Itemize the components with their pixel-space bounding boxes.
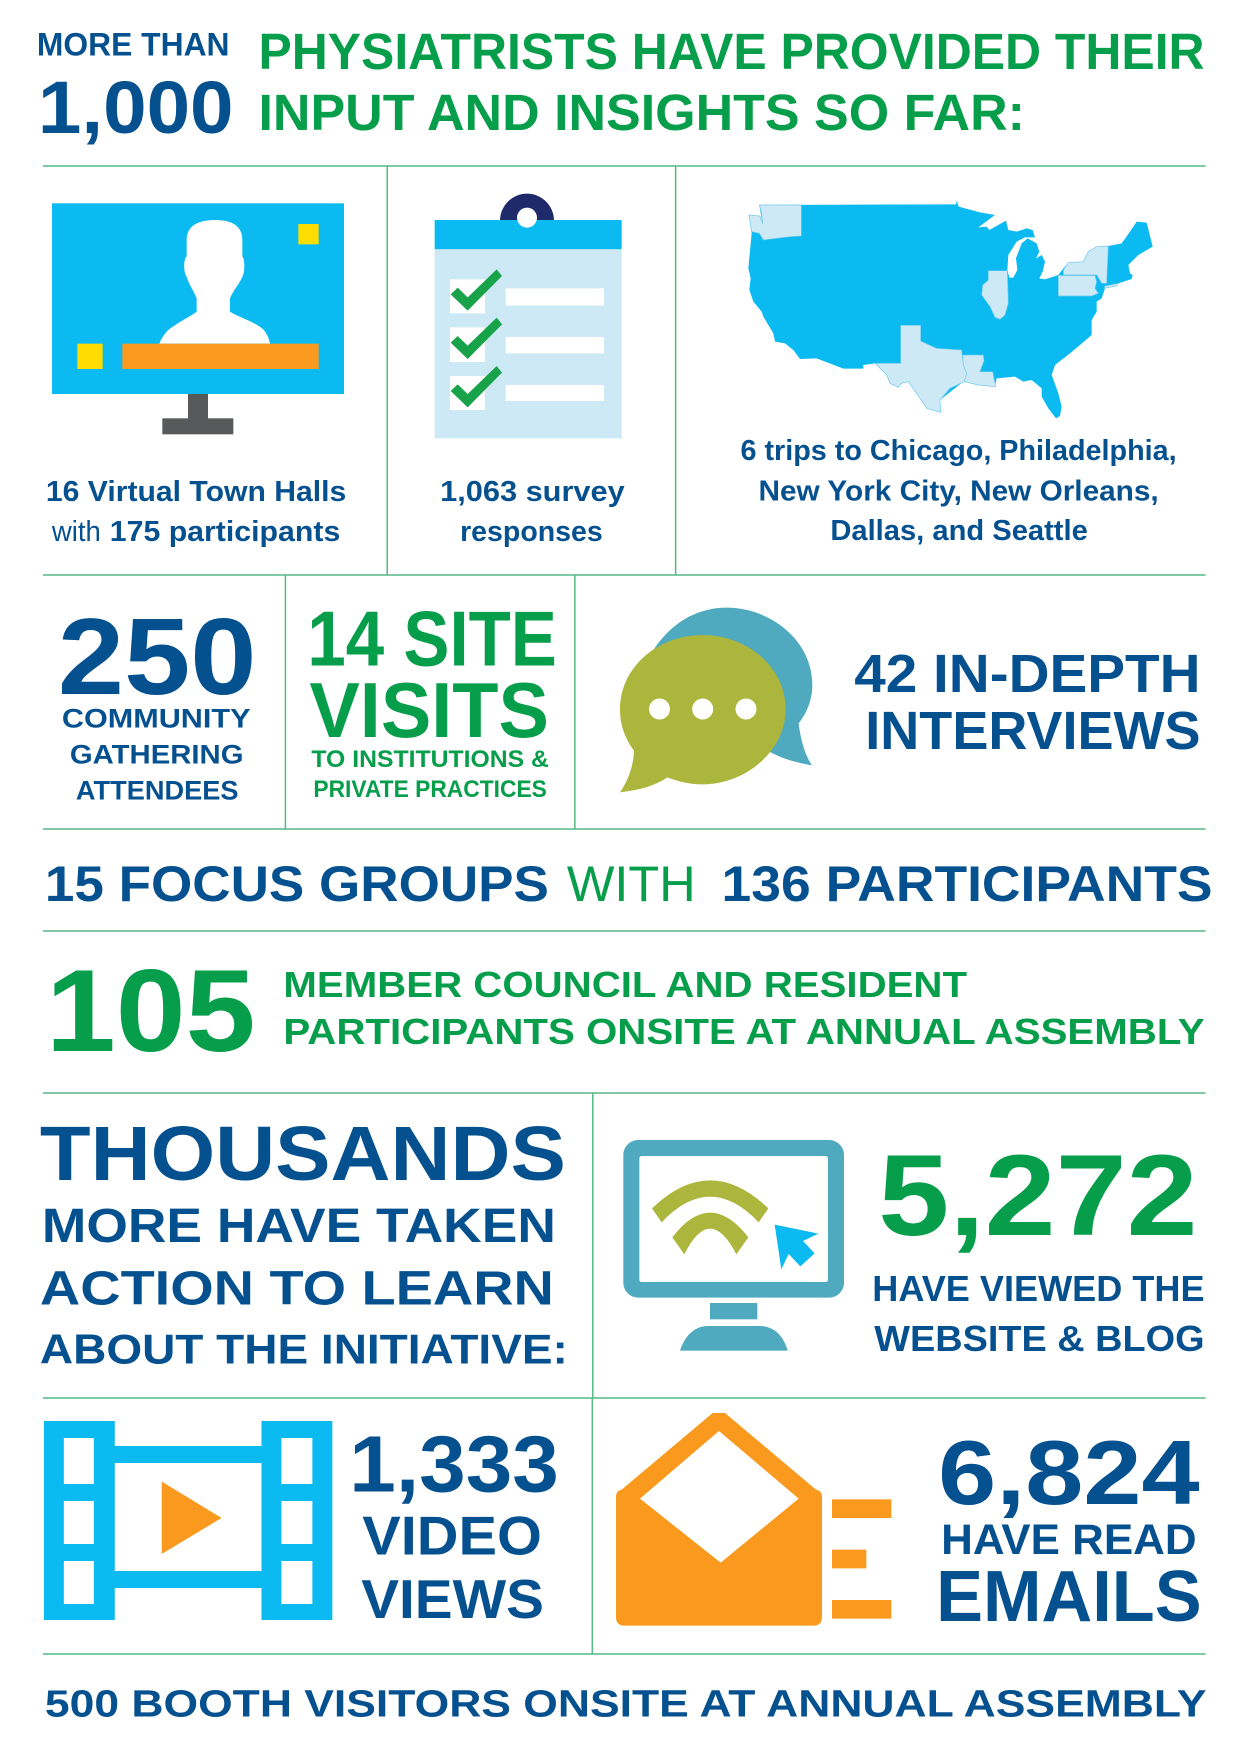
heading: thousands more: THOUSANDS <box>40 1111 566 1197</box>
icon: clipboard checklist <box>435 194 622 438</box>
icon: computer with wifi <box>623 1140 844 1351</box>
stat: 105 member council: 105 <box>46 945 255 1076</box>
heading: more than 1,000: 1,000 <box>38 66 234 149</box>
stat: 250 community gathering attendees: 250 <box>58 596 256 718</box>
panel: survey <box>435 194 625 548</box>
stat: 15 focus groups <box>45 856 1213 912</box>
text: trips caption: 6 trips to Chicago, Philadelphia, <box>741 435 1177 467</box>
icon: US map <box>748 201 1153 418</box>
stat: 15 focus groups: WITH <box>567 856 696 912</box>
text: trips caption <box>741 435 1177 547</box>
stat: 1,333 video views <box>349 1419 559 1630</box>
heading: physiatrists: INPUT AND INSIGHTS SO FAR: <box>258 84 1025 141</box>
stat: 6,824 have read emails: EMAILS <box>936 1557 1202 1637</box>
heading: more than 1,000: MORE THAN <box>37 26 230 63</box>
text: town halls caption: 175 participants <box>110 516 340 548</box>
stat: 1,333 video views: 1,333 <box>349 1419 559 1509</box>
stat: 500 booth visitors: 500 BOOTH VISITORS ONSITE AT ANNUAL ASSEMBLY <box>45 1683 1207 1726</box>
icon: speech bubbles <box>620 608 812 792</box>
stat: 42 in-depth interviews: INTERVIEWS <box>865 701 1201 761</box>
stat: 5,272 website views: 5,272 <box>878 1132 1198 1260</box>
heading: more than 1,000 <box>37 26 234 149</box>
text: town halls caption: with <box>51 516 101 548</box>
stat: 105 member council: MEMBER COUNCIL AND RESIDENT <box>283 964 967 1005</box>
text: survey caption: responses <box>460 516 603 548</box>
title block <box>37 23 1205 149</box>
icon: envelope <box>616 1413 891 1626</box>
text: survey caption: 1,063 survey <box>440 476 625 508</box>
stat: 250 community gathering attendees <box>58 596 256 806</box>
icon: video monitor <box>52 203 344 434</box>
text: survey caption <box>440 476 625 548</box>
heading: thousands more: ACTION TO LEARN <box>40 1263 554 1316</box>
stat: 5,272 website views: WEBSITE & BLOG <box>874 1318 1205 1359</box>
stat: 14 site visits: 14 SITE <box>307 595 557 683</box>
stat: 250 community gathering attendees: COMMUNITY <box>62 704 251 734</box>
panel: trips <box>741 201 1177 547</box>
stat: 105 member council <box>46 945 1205 1076</box>
stat: 1,333 video views: VIDEO <box>362 1505 542 1567</box>
stat: 1,333 video views: VIEWS <box>361 1568 544 1630</box>
stat: 250 community gathering attendees: ATTENDEES <box>76 776 239 806</box>
text: town halls caption: 16 Virtual Town Halls <box>46 476 346 508</box>
heading: thousands more: ABOUT THE INITIATIVE: <box>40 1325 568 1373</box>
stat: 14 site visits: VISITS <box>309 666 549 754</box>
heading: thousands more <box>40 1111 568 1373</box>
stat: 15 focus groups: 136 PARTICIPANTS <box>722 856 1213 912</box>
stat: 5,272 website views: HAVE VIEWED THE <box>872 1268 1205 1309</box>
stat: 250 community gathering attendees: GATHERING <box>70 740 244 770</box>
heading: physiatrists <box>258 23 1205 141</box>
heading: thousands more: MORE HAVE TAKEN <box>42 1200 556 1253</box>
heading: physiatrists: PHYSIATRISTS HAVE PROVIDED THEIR <box>258 23 1205 80</box>
text: trips caption: New York City, New Orleans, <box>758 475 1159 508</box>
stat: 42 in-depth interviews <box>854 644 1201 761</box>
stat: 14 site visits: PRIVATE PRACTICES <box>313 776 547 803</box>
stat: 5,272 website views <box>872 1132 1205 1359</box>
text: trips caption: Dallas, and Seattle <box>830 515 1088 547</box>
stat: 6,824 have read emails: HAVE READ <box>941 1516 1197 1564</box>
icon: film strip <box>44 1421 332 1620</box>
stat: 14 site visits: TO INSTITUTIONS & <box>311 746 549 773</box>
stat: 105 member council: PARTICIPANTS ONSITE AT ANNUAL ASSEMBLY <box>283 1011 1205 1052</box>
stat: 42 in-depth interviews: 42 IN-DEPTH <box>854 644 1201 704</box>
stat: 15 focus groups: 15 FOCUS GROUPS <box>45 856 549 912</box>
stat: 6,824 have read emails <box>936 1423 1202 1637</box>
text: town halls caption <box>46 476 346 548</box>
stat: 14 site visits <box>307 595 557 803</box>
stat: 6,824 have read emails: 6,824 <box>938 1423 1200 1524</box>
panel: virtual town halls <box>46 203 346 548</box>
